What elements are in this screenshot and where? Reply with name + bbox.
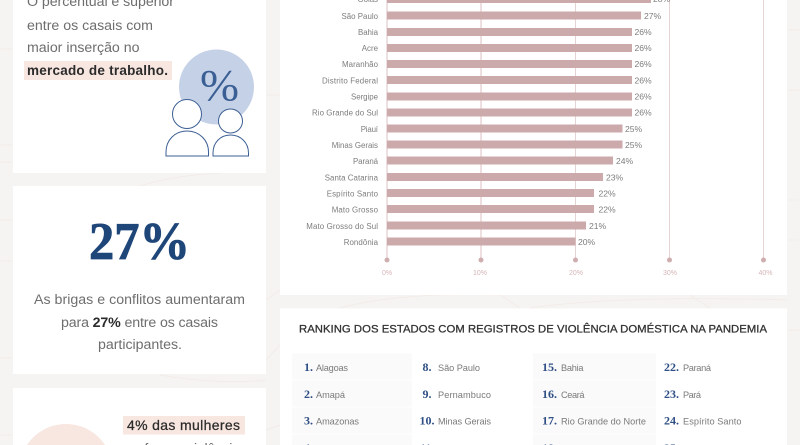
axis ticks and labels: 0% (382, 270, 392, 277)
state labels: Rio Grande do Sul (312, 108, 378, 118)
icon: percent and couple: % (200, 61, 239, 110)
value labels: 26% (634, 108, 652, 118)
text block: labour market: mercado de trabalho. (27, 63, 168, 78)
panel: bar chart (280, 0, 787, 295)
state labels: Rondônia (344, 238, 379, 247)
value labels: 21% (589, 221, 607, 231)
ranking column 4: Pará (683, 390, 702, 400)
ranking column 4: Espírito Santo (683, 416, 742, 426)
state labels: Bahia (358, 28, 379, 37)
value labels: 20% (578, 237, 596, 247)
state labels: Maranhão (342, 60, 379, 69)
value labels: 27% (644, 11, 662, 21)
axis ticks and labels (382, 258, 773, 277)
state labels: Piauí (361, 125, 379, 134)
ranking column 4 (664, 360, 742, 445)
ranking column 2: 10. (420, 414, 434, 428)
ranking column 2: Minas Gerais (438, 416, 491, 426)
ranking column 3: Rio Grande do Norte (561, 416, 646, 426)
ranking column 1: 1. (304, 360, 313, 374)
text block: labour market: entre os casais com (27, 18, 153, 34)
ranking column 3: 15. (542, 360, 557, 374)
ranking column 2: São Paulo (438, 363, 480, 373)
table cell backgrounds (292, 354, 656, 445)
icon: pink circle (27, 424, 105, 445)
value labels: 23% (606, 172, 624, 182)
value labels: 22% (598, 188, 616, 198)
ranking column 4: 22. (664, 360, 679, 374)
state labels: Espírito Santo (327, 190, 379, 198)
icon: percent and couple (166, 50, 254, 156)
highlight: 4% das mulheres: 4% das mulheres (127, 417, 240, 433)
state labels: Mato Grosso do Sul (306, 222, 378, 231)
value labels: 26% (634, 76, 652, 86)
state labels: Sergipe (351, 92, 379, 102)
state labels: Paraná (353, 157, 379, 166)
panel: conflicts (13, 186, 266, 374)
state labels: Distrito Federal (322, 76, 378, 86)
state labels: Santa Catarina (325, 174, 379, 182)
state labels: Acre (362, 44, 379, 53)
ranking column 3: Bahia (561, 363, 584, 373)
axis lines (387, 0, 764, 260)
axis ticks and labels: 30% (663, 270, 677, 277)
axis ticks and labels: 40% (758, 270, 773, 277)
ranking column 1: 2. (304, 387, 313, 401)
ranking column 1: Amazonas (316, 416, 359, 426)
value labels (578, 0, 671, 247)
axis ticks and labels: 20% (569, 270, 583, 277)
ranking column 2: 9. (422, 387, 432, 401)
text block: conflicts: As brigas e conflitos aumentaram (34, 292, 245, 308)
ranking heading: RANKING DOS ESTADOS COM REGISTROS DE VIOLÊNCIA DOMÉSTICA NA PANDEMIA (299, 323, 767, 336)
axis ticks and labels: 10% (473, 270, 487, 277)
value labels: 26% (634, 43, 652, 53)
ranking column 1: Alagoas (316, 363, 348, 373)
value labels: 25% (625, 124, 643, 134)
ranking column 1: 3. (304, 414, 313, 428)
ranking column 1: Amapá (316, 390, 346, 400)
state labels: Minas Gerais (332, 141, 378, 150)
text block: conflicts (34, 292, 245, 353)
panel: women 4% (13, 388, 266, 445)
ranking column 4: 23. (664, 387, 679, 401)
text block: labour market: maior inserção no (27, 40, 140, 56)
text block: labour market (24, 0, 174, 80)
ranking column 2 (420, 360, 491, 445)
value labels: 26% (634, 92, 652, 102)
state labels: São Paulo (342, 12, 379, 21)
panel: labour market (13, 0, 266, 173)
value labels: 26% (634, 59, 652, 69)
state labels: Mato Grosso (332, 206, 379, 214)
big number: 27%: 27% (89, 213, 190, 271)
text block: conflicts: para 27% entre os casais (61, 315, 218, 331)
text block: conflicts: participantes. (98, 337, 182, 353)
ranking column 3: 16. (542, 387, 557, 401)
ranking column 3: Ceará (561, 390, 585, 400)
value labels: 24% (616, 156, 634, 166)
ranking column 2: 8. (422, 360, 432, 374)
ranking column 4: Paraná (683, 363, 712, 373)
ranking column 4: 24. (664, 414, 679, 428)
value labels: 26% (634, 27, 652, 37)
value labels: 25% (625, 140, 643, 150)
ranking column 3 (542, 360, 646, 445)
ranking column 1 (304, 360, 359, 445)
panel: ranking (280, 308, 787, 445)
ranking column 3: 17. (542, 414, 557, 428)
state labels (306, 0, 379, 247)
ranking column 2: Pernambuco (438, 390, 491, 400)
value labels: 22% (598, 204, 616, 214)
bars (387, 0, 651, 246)
